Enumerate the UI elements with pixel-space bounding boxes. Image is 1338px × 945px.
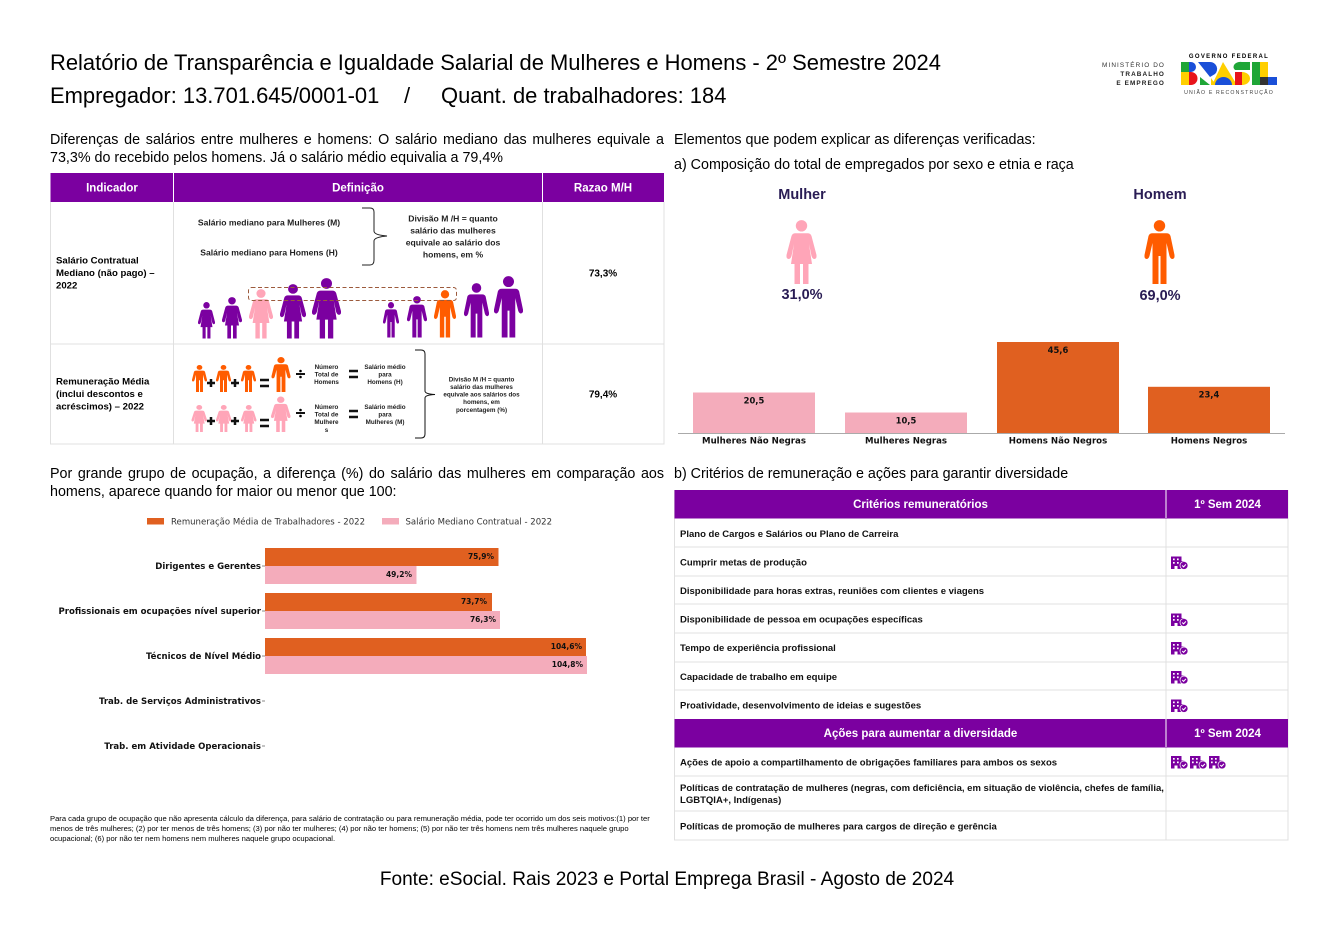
logo: Governo Federal Brasil: UNIÃO E RECONSTRUÇÃO xyxy=(1184,89,1274,96)
average definition text: Número xyxy=(315,404,339,411)
employer subtitle: Empregador: 13.701.645/0001-01 xyxy=(50,83,379,108)
bar chart: salary difference by occupation: Trab. em Atividade Operacionais xyxy=(104,742,261,752)
average definition text: equivale aos salários dos xyxy=(443,392,520,398)
ratio values: 73,3% xyxy=(589,268,617,280)
bar chart: sex and race composition: 20,5 xyxy=(744,396,765,406)
panel: women share: 31,0% xyxy=(781,287,823,303)
header: criteria xyxy=(674,490,1288,518)
table: criteria and actions xyxy=(674,490,1288,840)
header: actions: 1º Sem 2024 xyxy=(1194,728,1262,740)
intro text: salary difference: Diferenças de salários entre mulheres e homens: O salário mediano das mulheres equivale a 73,3% do recebido pelos homens. Já o salário médio equivalia a 79,4% xyxy=(50,132,664,166)
action rows: Políticas de promoção de mulheres para cargos de direção e gerência xyxy=(680,822,997,832)
chart legend: Salário Mediano Contratual - 2022 xyxy=(406,518,552,528)
icons: actions adopted xyxy=(1171,756,1226,769)
average definition text: Salário médio xyxy=(364,364,406,371)
criteria rows: Plano de Cargos e Salários ou Plano de Carreira xyxy=(680,529,899,540)
panel: women share xyxy=(778,187,826,303)
employer subtitle xyxy=(50,83,726,108)
average definition text: Salário médio xyxy=(364,404,406,411)
panel: men share xyxy=(1133,187,1187,304)
bar chart: salary difference by occupation: 104,6% xyxy=(551,642,582,651)
chart legend: Remuneração Média de Trabalhadores - 2022 xyxy=(171,516,365,528)
bar chart: salary difference by occupation: Trab. de Serviços Administrativos xyxy=(99,697,261,707)
bar chart: sex and race composition: 10,5 xyxy=(896,416,917,426)
average definition text: salário das mulheres xyxy=(450,384,513,391)
header: criteria: 1º Sem 2024 xyxy=(1194,499,1262,511)
average definition text: Mulheres (M) xyxy=(366,419,404,426)
average definition text: para xyxy=(378,372,392,378)
table header: Razao M/H xyxy=(574,182,632,194)
logo: Ministério do Trabalho e Emprego xyxy=(1102,60,1165,87)
average definition text: s xyxy=(325,427,329,434)
intro text: occupation groups: Por grande grupo de ocupação, a diferença (%) do salário das mulheres em comparação aos homens, aparece quando for maior ou menor que 100: xyxy=(50,466,664,500)
average formula: women xyxy=(191,397,358,432)
median definition text: homens, em % xyxy=(423,250,483,260)
footnote: Para cada grupo de ocupação que não apresenta cálculo da diferença, para salário de contratação ou para remuneração média, pode ter ocorrido um dos seis motivos:(1) por ter menos de três mulheres; (2) por ter menos de três homens; (3) por não ter mulheres; (4) por não ter homens; (5) por não ter três homens nem três mulheres naquele grupo ocupacional; (6) por não ter nem homens nem mulheres naquele grupo ocupacional. xyxy=(50,814,650,842)
source line: Fonte: eSocial. Rais 2023 e Portal Emprega Brasil - Agosto de 2024 xyxy=(380,869,954,890)
average definition text: Homens (H) xyxy=(367,379,403,386)
average definition text: Divisão M /H = quanto xyxy=(449,376,514,384)
logo: Governo Federal Brasil xyxy=(1181,54,1277,96)
action rows xyxy=(680,758,1164,832)
row label: remuneração média: Remuneração Média xyxy=(56,376,150,388)
heading: criteria: b) Critérios de remuneração e ações para garantir diversidade xyxy=(674,466,1068,482)
bar chart: sex and race composition: Homens Negros xyxy=(1171,436,1247,446)
bar chart: salary difference by occupation: 49,2% xyxy=(386,570,412,579)
panel: men share: 69,0% xyxy=(1139,288,1181,304)
criteria rows: Disponibilidade para horas extras, reuniões com clientes e viagens xyxy=(680,586,984,597)
panel: women share: Mulher xyxy=(778,187,826,203)
header: actions: Ações para aumentar a diversidade xyxy=(824,728,1017,740)
average definition text: Mulhere xyxy=(314,419,339,426)
logo: Governo Federal Brasil: GOVERNO FEDERAL xyxy=(1189,54,1269,60)
table header: Indicador xyxy=(86,182,138,194)
row label: salário contratual: Mediano (não pago) – xyxy=(56,268,155,279)
criteria rows: Capacidade de trabalho em equipe xyxy=(680,672,837,683)
median definition text: Salário mediano para Homens (H) xyxy=(200,248,338,258)
criteria rows: Tempo de experiência profissional xyxy=(680,643,836,654)
action rows: Políticas de contratação de mulheres (negras, com deficiência, em situação de violência, chefes de família, xyxy=(680,783,1164,794)
brace: median xyxy=(362,208,387,265)
bar chart: sex and race composition: 45,6 xyxy=(1048,345,1069,355)
icons: criteria adopted xyxy=(1171,556,1188,712)
average formula: men xyxy=(192,357,358,392)
criteria rows xyxy=(680,529,984,712)
ratio values xyxy=(589,268,617,400)
average definition text: Total de xyxy=(315,372,339,378)
table header xyxy=(50,173,664,202)
average definition text: Total de xyxy=(315,412,339,418)
median people row xyxy=(198,276,523,338)
header: actions xyxy=(674,719,1288,748)
average definition text: homens, em xyxy=(463,399,500,406)
average definition text: porcentagem (%) xyxy=(456,407,507,414)
bar chart: salary difference by occupation xyxy=(58,548,587,752)
heading: composition: a) Composição do total de empregados por sexo e etnia e raça xyxy=(674,157,1074,173)
heading: explaining elements: Elementos que podem explicar as diferenças verificadas: xyxy=(674,132,1036,148)
row label: remuneração média: acréscimos) – 2022 xyxy=(56,402,144,412)
average definition text: Número xyxy=(315,364,339,371)
chart legend xyxy=(147,516,552,528)
average definition text: Homens xyxy=(314,379,339,386)
brace: average xyxy=(415,350,435,438)
icon: man xyxy=(1144,220,1175,284)
employer subtitle: / xyxy=(404,83,410,108)
average definition text xyxy=(314,364,520,434)
logo: Ministério do Trabalho e Emprego: E EMPREGO xyxy=(1116,80,1165,87)
employer subtitle: Quant. de trabalhadores: 184 xyxy=(441,83,726,108)
header: criteria: Critérios remuneratórios xyxy=(853,499,988,511)
table header: Definição xyxy=(332,182,384,194)
logo: Ministério do Trabalho e Emprego: TRABALHO xyxy=(1120,71,1165,78)
row label: remuneração média: (inclui descontos e xyxy=(56,389,143,400)
bar chart: salary difference by occupation: 75,9% xyxy=(468,552,494,561)
row label: salário contratual: Salário Contratual xyxy=(56,256,139,266)
bar chart: salary difference by occupation: 104,8% xyxy=(552,660,583,669)
bar chart: salary difference by occupation: 73,7% xyxy=(461,597,487,606)
bar chart: salary difference by occupation: Dirigentes e Gerentes xyxy=(155,562,261,572)
table: salary indicators xyxy=(50,173,664,444)
median definition text: salário das mulheres xyxy=(410,226,496,236)
criteria rows: Proatividade, desenvolvimento de ideias e sugestões xyxy=(680,700,921,712)
icon: woman xyxy=(786,220,817,284)
title: Relatório de Transparência e Igualdade Salarial de Mulheres e Homens - 2º Semestre 2024 xyxy=(50,50,941,75)
bar chart: sex and race composition xyxy=(678,342,1285,446)
bar chart: sex and race composition: 23,4 xyxy=(1199,390,1220,400)
bar chart: sex and race composition: Mulheres Negras xyxy=(865,436,947,446)
median definition text xyxy=(198,214,501,260)
bar chart: salary difference by occupation: Profissionais em ocupações nível superior xyxy=(58,607,262,617)
bar chart: sex and race composition: Mulheres Não Negras xyxy=(702,436,806,446)
median definition text: Salário mediano para Mulheres (M) xyxy=(198,218,340,228)
bar chart: salary difference by occupation: Técnicos de Nível Médio xyxy=(146,651,261,662)
row label: salário contratual: 2022 xyxy=(56,280,77,292)
criteria rows: Disponibilidade de pessoa em ocupações específicas xyxy=(680,614,923,626)
criteria rows: Cumprir metas de produção xyxy=(680,558,807,568)
row label: remuneração média xyxy=(56,376,150,412)
average definition text: para xyxy=(378,412,392,418)
ratio values: 79,4% xyxy=(589,390,617,400)
median definition text: Divisão M /H = quanto xyxy=(408,214,498,224)
median definition text: equivale ao salário dos xyxy=(406,238,501,248)
action rows: Ações de apoio a compartilhamento de obrigações familiares para ambos os sexos xyxy=(680,758,1057,768)
panel: men share: Homem xyxy=(1133,187,1187,203)
action rows: LGBTQIA+, Indígenas) xyxy=(680,795,781,806)
logo: Ministério do Trabalho e Emprego: MINISTÉRIO DO xyxy=(1102,60,1165,69)
bar chart: sex and race composition: Homens Não Negros xyxy=(1009,436,1107,446)
bar chart: salary difference by occupation: 76,3% xyxy=(470,615,496,624)
row label: salário contratual xyxy=(56,256,155,292)
